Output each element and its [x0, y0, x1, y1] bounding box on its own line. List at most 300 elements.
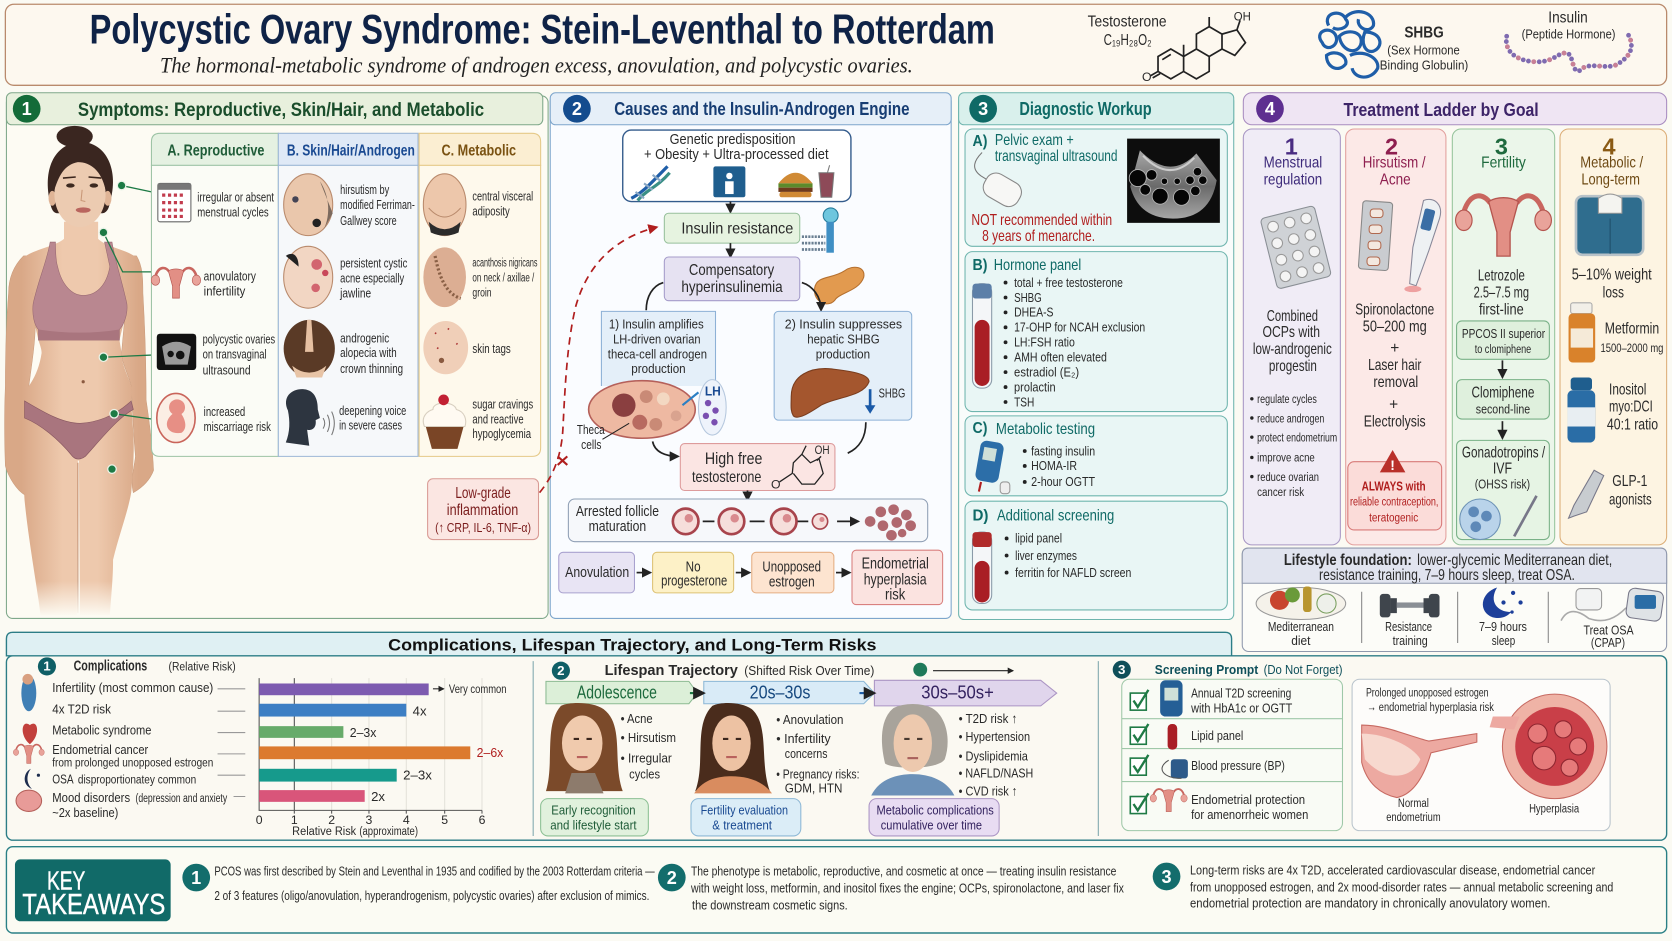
arrow: [1501, 421, 1503, 438]
column A: reproductive: on transvaginal: [203, 346, 267, 361]
warning callout: ALWAYS with: [1362, 478, 1426, 493]
D: additional screening: Additional screening: [997, 507, 1114, 524]
sub-panel: complications chart: Complications: [74, 659, 147, 675]
pathway box 2: production: [816, 346, 870, 361]
screening checklist: Annual T2D screening: [1191, 685, 1291, 700]
column B: skin, hair, androgen: [278, 133, 418, 456]
column C: metabolic: acanthosis nigricans: [472, 256, 537, 270]
icon: blood tube: [972, 284, 992, 388]
callout: fertility evaluation: & treatment: [712, 818, 772, 833]
panel: complications, lifespan, long-term risks: [6, 632, 1667, 840]
icon: hirsutism face: [284, 174, 333, 236]
column 1: menstrual regulation: Combined: [1267, 308, 1318, 325]
section heading: [6, 632, 1232, 656]
callout: metabolic complications: cumulative over time: [881, 818, 982, 833]
warning callout: [1348, 450, 1442, 530]
A: pelvic exam: A): [972, 133, 987, 150]
C: metabolic testing: 2-hour OGTT: [1031, 474, 1095, 489]
panel 4 heading: 4: [1265, 99, 1275, 119]
sub-panel: complications chart: Endometrial cancer: [52, 742, 149, 757]
lifestyle foundation: diet: [1291, 633, 1311, 648]
gonadotropins box: Gonadotropins /: [1462, 444, 1546, 461]
icon: fetus: [157, 393, 195, 443]
column A: reproductive: [151, 133, 278, 456]
genetic and diet box: Genetic predisposition: [670, 132, 795, 148]
pathway box 1: [601, 311, 716, 386]
icon: pills and laser: [1358, 199, 1441, 292]
sub-panel: lifespan trajectory: GDM, HTN: [785, 780, 842, 795]
callout: low-grade inflammation: Low-grade: [455, 485, 511, 502]
column 1: menstrual regulation: protect endometrium: [1257, 430, 1337, 444]
column 4: metabolic and long-term: Inositol: [1609, 382, 1646, 399]
screening checklist: [1122, 679, 1342, 831]
screening checklist: Blood pressure (BP): [1191, 758, 1285, 773]
D: additional screening: [965, 501, 1227, 610]
gonadotropins box: (OHSS risk): [1475, 476, 1530, 491]
column 4: metabolic and long-term: Long-term: [1581, 171, 1640, 188]
bar chart: 2–3x: [350, 725, 377, 740]
arrested follicle maturation: maturation: [589, 519, 646, 535]
endometrium illustration: Hyperplasia: [1529, 802, 1579, 816]
sub-panel: screening prompt: [1113, 661, 1610, 831]
column 2: hirsutism and acne: +: [1390, 340, 1399, 357]
icon: DNA: [631, 166, 670, 200]
icon: scale person: [713, 166, 745, 197]
high free testosterone box: testosterone: [692, 469, 761, 486]
icon: orange bottle: [1569, 303, 1595, 363]
column B: skin, hair, androgen: persistent cystic: [340, 256, 408, 271]
column A: reproductive: menstrual cycles: [197, 204, 269, 219]
endometrium illustration: → endometrial hyperplasia risk: [1367, 700, 1495, 714]
takeaway 1: 1: [191, 868, 201, 888]
column 1: menstrual regulation: cancer risk: [1257, 485, 1305, 499]
takeaway 3: endometrial protection are mandatory in chronically anovulatory women.: [1190, 895, 1550, 910]
icon: pill blister pack: [1260, 205, 1331, 289]
testosterone molecule: OH: [1234, 9, 1251, 23]
callout: early recognition: and lifestyle start: [550, 818, 637, 833]
column C: metabolic: skin tags: [472, 341, 511, 356]
column 1: menstrual regulation: Menstrual: [1264, 154, 1322, 171]
stage banners: 30s–50s+: [921, 682, 994, 702]
column 2: hirsutism and acne: Electrolysis: [1364, 414, 1426, 431]
C: metabolic testing: C): [972, 420, 987, 437]
column 2: hirsutism and acne: Laser hair: [1368, 357, 1421, 374]
arrows into testosterone: [653, 422, 866, 456]
column 1: menstrual regulation: regulation: [1264, 171, 1322, 188]
callout: low-grade inflammation: [428, 479, 539, 540]
sub-panel: lifespan trajectory: cycles: [629, 766, 660, 781]
column B: skin, hair, androgen: in severe cases: [339, 418, 402, 433]
panel 4 heading: [1243, 93, 1667, 125]
column C: metabolic: hypoglycemia: [472, 426, 531, 441]
key takeaways badge: [15, 859, 171, 921]
column 4: metabolic and long-term: loss: [1603, 284, 1624, 301]
column A: reproductive: irregular or absent: [197, 190, 274, 205]
testosterone molecule: [1088, 9, 1251, 84]
column 2: hirsutism and acne: [1346, 129, 1446, 545]
column C: metabolic: and reactive: [472, 411, 524, 426]
icon: glucometer: [974, 440, 1010, 494]
column 1: menstrual regulation: OCPs with: [1263, 324, 1320, 341]
PPCOS box: PPCOS II superior: [1462, 326, 1546, 341]
anovulation cascade: Unopposed: [762, 560, 821, 576]
compensatory hyperinsulinemia box: hyperinsulinemia: [681, 279, 783, 296]
icon: abdomen: [423, 174, 466, 236]
gonadotropins box: IVF: [1493, 460, 1512, 477]
column 3: fertility: first-line: [1479, 302, 1524, 319]
icon: mediterranean plate: [1256, 586, 1346, 620]
callout: fertility evaluation: [691, 799, 801, 836]
column 1: menstrual regulation: 1: [1285, 134, 1298, 160]
clomiphene box: [1457, 380, 1549, 419]
B: hormone panel: DHEA-S: [1014, 305, 1054, 320]
A: pelvic exam: Pelvic exam +: [995, 132, 1074, 149]
genetic and diet box: + Obesity + Ultra-processed diet: [644, 147, 829, 163]
PPCOS box: [1457, 321, 1549, 359]
callout: metabolic complications: Metabolic complications: [877, 803, 994, 818]
sub-panel: screening prompt: (Do Not Forget): [1264, 662, 1342, 677]
warning callout: teratogenic: [1369, 510, 1418, 524]
icon: CPAP machine: [1561, 587, 1664, 622]
anovulation cascade: risk: [885, 586, 906, 603]
column B: skin, hair, androgen: modified Ferriman-: [340, 197, 415, 212]
A: pelvic exam: [965, 129, 1227, 246]
B: hormone panel: 17-OHP for NCAH exclusion: [1014, 320, 1145, 335]
sub-panel: complications chart: (Relative Risk): [169, 660, 236, 674]
column B: skin, hair, androgen: alopecia with: [340, 345, 397, 360]
icon: acne cheek: [284, 246, 333, 308]
dashed inflammation feedback arrow: [540, 227, 657, 493]
column 4: metabolic and long-term: GLP-1: [1612, 473, 1647, 490]
screening checklist: Lipid panel: [1191, 728, 1243, 743]
column B: skin, hair, androgen: androgenic: [340, 330, 389, 345]
takeaway 2: [658, 863, 1124, 913]
icon: red tube: [972, 532, 992, 604]
insulin resistance box: [664, 213, 800, 243]
testosterone molecule: Testosterone: [1088, 14, 1167, 31]
lifestyle foundation: 7–9 hours: [1479, 619, 1527, 634]
high free testosterone box: O: [771, 477, 780, 491]
pathway box 2: SHBG: [879, 386, 905, 401]
icon: small ultrasound: [157, 334, 196, 370]
icon: crown thinning hair: [284, 320, 335, 377]
bar chart: (approximate): [359, 824, 418, 838]
icon: uterus: [151, 268, 201, 298]
column C: metabolic: adiposity: [472, 203, 510, 218]
lifestyle foundation: sleep: [1492, 633, 1515, 648]
warning callout: reliable contraception,: [1350, 494, 1438, 508]
testosterone molecule: C₁₉H₂₈O₂: [1104, 32, 1152, 49]
sub-panel: lifespan trajectory: • Acne: [621, 711, 653, 726]
column 2: hirsutism and acne: 50–200 mg: [1363, 319, 1427, 336]
panel 1 heading: Symptoms: Reproductive, Skin/Hair, and Metabolic: [78, 100, 484, 121]
insulin peptide: (Peptide Hormone): [1522, 26, 1615, 41]
column 1: menstrual regulation: low-androgenic: [1253, 341, 1332, 358]
pathway box 1: production: [631, 361, 686, 376]
icon: cupcake: [423, 395, 466, 449]
bar chart: 0: [256, 813, 263, 827]
anovulation cascade: Endometrial: [862, 555, 929, 572]
B: hormone panel: total + free testosterone: [1014, 275, 1123, 290]
panel 2 heading: Causes and the Insulin-Androgen Engine: [614, 99, 910, 119]
sub-panel: screening prompt: 3: [1118, 662, 1125, 677]
pathway box 2: 2) Insulin suppresses: [785, 316, 902, 331]
key takeaways badge: KEY: [47, 867, 85, 895]
woman figure: [5, 126, 154, 616]
sub-panel: lifespan trajectory: • Pregnancy risks:: [776, 766, 859, 781]
sub-panel: complications chart: Mood disorders: [52, 790, 130, 805]
arrested follicle maturation: [568, 499, 928, 542]
insulin resistance box: Insulin resistance: [681, 221, 793, 238]
sub-panel: complications chart: ~2x baseline): [52, 805, 118, 820]
anovulation cascade: progesterone: [661, 573, 727, 589]
takeaway 2: 2: [667, 868, 677, 888]
lifestyle foundation: [1242, 548, 1667, 652]
column 4: metabolic and long-term: Metabolic /: [1580, 154, 1644, 171]
icon: GLP-1 pen: [1569, 470, 1604, 518]
sub-panel: complications chart: Infertility (most common cause): [52, 680, 213, 695]
figure pointers: [99, 181, 151, 473]
panel 4 heading: Treatment Ladder by Goal: [1344, 100, 1539, 120]
portrait: older adult: [871, 704, 954, 795]
endometrium illustration: endometrium: [1386, 810, 1441, 824]
bar chart: 2x: [371, 789, 385, 804]
testosterone molecule: O: [1142, 70, 1152, 84]
column 3: fertility: Fertility: [1481, 154, 1526, 171]
D: additional screening: lipid panel: [1015, 531, 1062, 546]
sub-panel: lifespan trajectory: • T2D risk ↑: [959, 711, 1017, 726]
high free testosterone box: High free: [705, 449, 762, 468]
sub-panel: lifespan trajectory: • Dyslipidemia: [959, 748, 1028, 763]
icon: liver: [791, 369, 869, 417]
column 3: fertility: 2.5–7.5 mg: [1474, 284, 1529, 301]
anovulation cascade: [559, 550, 943, 605]
icon: ultrasound probe: [975, 152, 1025, 210]
column 4: metabolic and long-term: Metformin: [1605, 321, 1659, 338]
icon: ovary with LH: Theca: [577, 422, 605, 437]
column A: reproductive: A. Reproductive: [167, 143, 265, 160]
A: pelvic exam: 8 years of menarche.: [982, 228, 1095, 245]
D: additional screening: ferritin for NAFLD screen: [1015, 565, 1131, 580]
icon: calendar: [158, 183, 191, 222]
genetic and diet box: [623, 130, 851, 202]
compensatory hyperinsulinemia box: Compensatory: [689, 262, 774, 279]
icon: blue bottle: [1567, 377, 1595, 443]
stage banners: Adolescence: [577, 682, 657, 702]
sub-panel: lifespan trajectory: • Anovulation: [776, 712, 843, 727]
A: pelvic exam: NOT recommended within: [971, 212, 1112, 229]
B: hormone panel: prolactin: [1014, 379, 1056, 394]
high free testosterone box: OH: [815, 443, 830, 457]
sub-panel: lifespan trajectory: 2: [557, 663, 565, 678]
icon: weighing scale: [1576, 194, 1643, 255]
bar chart: 1: [291, 813, 298, 827]
title: Polycystic Ovary Syndrome: Stein-Leventhal to Rotterdam: [90, 6, 995, 53]
lifestyle foundation: Treat OSA: [1583, 622, 1634, 637]
column 2: hirsutism and acne: Spironolactone: [1355, 302, 1434, 319]
arrested follicle maturation: Arrested follicle: [576, 504, 659, 520]
column B: skin, hair, androgen: acne especially: [340, 271, 404, 286]
pathway box 2: hepatic SHBG: [807, 331, 880, 346]
A: pelvic exam: transvaginal ultrasound: [995, 148, 1118, 165]
sub-panel: lifespan trajectory: (Shifted Risk Over Time): [744, 663, 874, 678]
lifestyle foundation: Mediterranean: [1268, 619, 1334, 634]
column 4: metabolic and long-term: agonists: [1609, 491, 1652, 508]
SHBG protein: Binding Globulin): [1380, 57, 1468, 72]
sub-panel: screening prompt: Screening Prompt: [1155, 662, 1259, 677]
sub-panel: lifespan trajectory: [541, 662, 1057, 836]
pathway box 1: theca-cell androgen: [608, 346, 707, 361]
panel 2 heading: [550, 93, 951, 125]
insulin peptide: [1506, 9, 1631, 71]
C: metabolic testing: fasting insulin: [1031, 443, 1095, 458]
icon: burger and drink: [778, 165, 834, 197]
sub-panel: lifespan trajectory: concerns: [785, 746, 828, 761]
panel 3 heading: 3: [978, 99, 988, 119]
arrow: [1501, 360, 1503, 377]
column A: reproductive: polycystic ovaries: [203, 331, 275, 346]
compensatory hyperinsulinemia box: [664, 257, 800, 301]
C: metabolic testing: [965, 416, 1227, 496]
callout: metabolic complications: [869, 799, 999, 836]
panel 3: diagnostic workup: [959, 93, 1234, 620]
anovulation cascade: estrogen: [769, 574, 815, 590]
clomiphene box: Clomiphene: [1472, 385, 1534, 402]
sub-panel: lifespan trajectory: • NAFLD/NASH: [959, 765, 1033, 780]
pathway box 1: 1) Insulin amplifies: [609, 316, 704, 331]
sub-panel: lifespan trajectory: • Irregular: [621, 750, 672, 765]
sub-panel: complications chart: (depression and anxiety: [135, 791, 228, 805]
C: metabolic testing: HOMA-IR: [1031, 458, 1077, 473]
lifestyle foundation: Resistance: [1385, 619, 1432, 634]
B: hormone panel: TSH: [1014, 394, 1034, 409]
sub-panel: lifespan trajectory: • Infertility: [776, 731, 831, 746]
column 2: hirsutism and acne: Hirsutism /: [1363, 154, 1426, 171]
complication icons: [13, 674, 44, 811]
icon: dumbbell: [1380, 594, 1440, 617]
lifestyle foundation: lower-glycemic Mediterranean diet,: [1417, 552, 1612, 569]
subtitle: The hormonal-metabolic syndrome of androgen excess, anovulation, and polycystic ovaries.: [160, 53, 913, 78]
anovulation cascade: Anovulation: [565, 565, 629, 581]
sub-panel: complications chart: [13, 657, 507, 838]
takeaway 1: [182, 863, 655, 903]
column 3: fertility: 3: [1495, 134, 1508, 160]
icon: ovary with LH: LH: [705, 384, 721, 399]
icon: voice silhouette: [286, 389, 334, 446]
anovulation cascade: hyperplasia: [864, 571, 927, 588]
anovulation cascade: No: [686, 560, 701, 576]
column 3: fertility: Letrozole: [1478, 267, 1525, 284]
column C: metabolic: sugar cravings: [472, 396, 533, 411]
column C: metabolic: central visceral: [472, 188, 533, 203]
gonadotropins box: [1457, 440, 1549, 540]
sub-panel: lifespan trajectory: • CVD risk ↑: [959, 783, 1017, 798]
panel 1: symptoms: [5, 93, 548, 618]
takeaway 1: PCOS was first described by Stein and Leventhal in 1935 and codified by the 2003 Rotterdam criteria —: [214, 863, 655, 878]
sub-panel: complications chart: disproportionatey common: [78, 773, 196, 787]
column 1: menstrual regulation: [1243, 129, 1340, 545]
lifestyle foundation: resistance training, 7–9 hours sleep, treat OSA.: [1319, 567, 1575, 584]
panel: key takeaways: [6, 847, 1667, 933]
column B: skin, hair, androgen: jawline: [339, 285, 371, 300]
bar chart: [256, 678, 507, 838]
panel 1 heading: 1: [22, 99, 32, 119]
icon: acanthosis skin: [423, 247, 466, 307]
arrow: [729, 243, 731, 257]
stage banners: 20s–30s: [750, 682, 810, 702]
lifestyle foundation: training: [1393, 633, 1428, 648]
takeaway 2: the downstream cosmetic signs.: [692, 898, 848, 913]
icon: skin tags: [423, 321, 468, 374]
column 4: metabolic and long-term: 40:1 ratio: [1607, 417, 1658, 434]
endometrium illustration: Prolonged unopposed estrogen: [1366, 685, 1489, 699]
callout: early recognition: [541, 799, 648, 836]
portrait: adolescent: [546, 703, 623, 793]
panel 4: treatment ladder: [1242, 93, 1667, 652]
panel 3 heading: [959, 93, 1234, 125]
high free testosterone box: [680, 443, 835, 491]
B: hormone panel: LH:FSH ratio: [1014, 335, 1075, 350]
bar chart: Relative Risk: [292, 824, 357, 838]
column B: skin, hair, androgen: Gallwey score: [340, 213, 397, 228]
sub-panel: complications chart: from prolonged unopposed estrogen: [52, 756, 213, 770]
takeaway 2: The phenotype is metabolic, reproductive, and cosmetic at once — treating insulin resistance: [691, 863, 1116, 878]
column B: skin, hair, androgen: hirsutism by: [340, 182, 389, 197]
column B: skin, hair, androgen: crown thinning: [340, 361, 403, 376]
portrait: young adult: [694, 703, 772, 793]
column 4: metabolic and long-term: 4: [1603, 134, 1616, 160]
column 1: menstrual regulation: reduce androgen: [1257, 411, 1324, 425]
column C: metabolic: groin: [472, 285, 492, 299]
ultrasound image: [1127, 139, 1220, 223]
sub-panel: complications chart: OSA: [52, 772, 74, 787]
D: additional screening: liver enzymes: [1015, 548, 1077, 563]
takeaway 2: with weight loss, metformin, and inositol fixes the engine; OCPs, spironolactone, and laser fix: [690, 880, 1124, 895]
warning callout: !: [1390, 457, 1395, 473]
column B: skin, hair, androgen: deepening voice: [339, 403, 406, 418]
lifestyle foundation: Lifestyle foundation:: [1284, 552, 1412, 569]
callout: early recognition: Early recognition: [551, 803, 636, 818]
sub-panel: complications chart: 1: [43, 659, 51, 674]
column 1: menstrual regulation: reduce ovarian: [1257, 470, 1319, 484]
column 4: metabolic and long-term: myo:DCI: [1609, 399, 1653, 416]
stage banners: [546, 680, 1057, 706]
screening checklist: with HbA1c or OGTT: [1190, 700, 1292, 715]
branching arrows: [646, 283, 821, 310]
endometrium illustration: Normal: [1398, 796, 1429, 810]
column A: reproductive: infertility: [204, 283, 246, 298]
B: hormone panel: Hormone panel: [994, 257, 1081, 274]
B: hormone panel: AMH often elevated: [1014, 349, 1107, 364]
bar chart: 3: [366, 813, 373, 827]
arrow: [746, 490, 748, 500]
column 4: metabolic and long-term: [1560, 129, 1667, 545]
callout: low-grade inflammation: (↑ CRP, IL-6, TNF-α): [435, 520, 531, 535]
panel 2 heading: 2: [572, 99, 582, 119]
insulin peptide: Insulin: [1548, 9, 1588, 26]
SHBG protein: (Sex Hormone: [1387, 42, 1460, 57]
PPCOS box: to clomiphene: [1475, 342, 1531, 356]
column 3: fertility: [1452, 129, 1555, 545]
panel 3 heading: Diagnostic Workup: [1019, 99, 1152, 119]
callout: low-grade inflammation: inflammation: [447, 502, 518, 519]
column A: reproductive: increased: [204, 404, 245, 419]
column A: reproductive: miscarriage risk: [204, 419, 271, 434]
takeaway 1: 2 of 3 features (oligo/anovulation, hyperandrogenism, polycystic ovaries) after exclusion of mimics.: [214, 888, 649, 903]
icon: pancreas: [814, 267, 864, 304]
icon: receptor: [802, 208, 838, 253]
B: hormone panel: SHBG: [1014, 290, 1042, 305]
